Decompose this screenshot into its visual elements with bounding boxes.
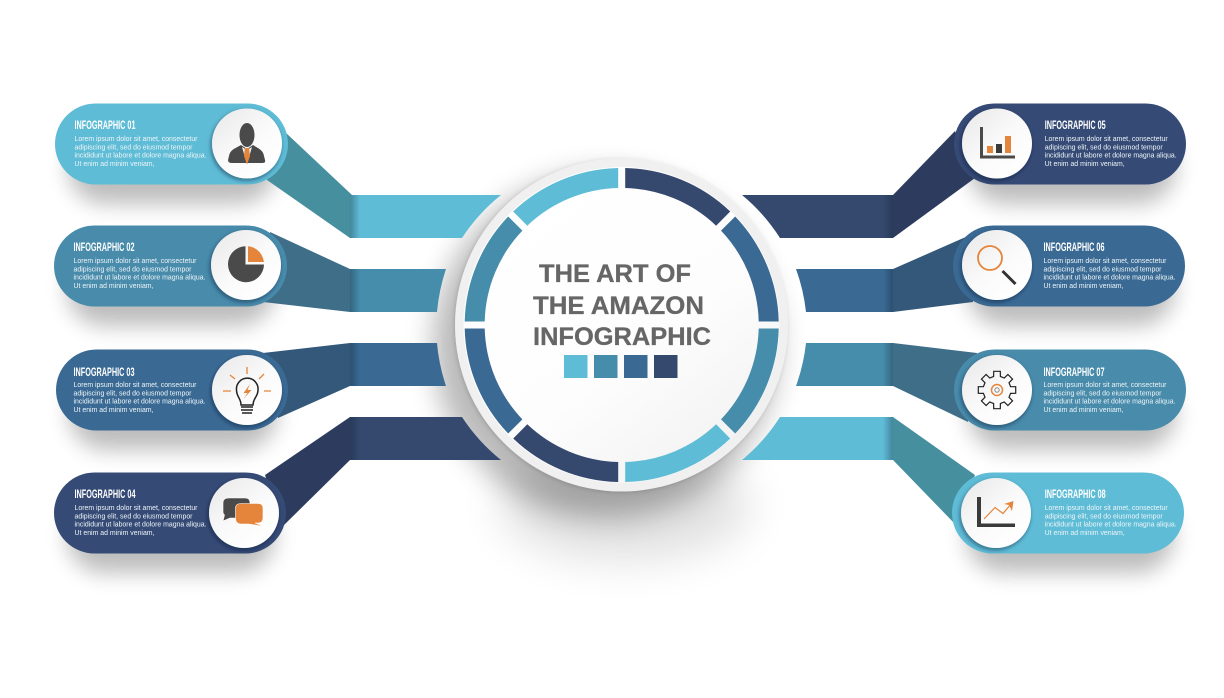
panel: infographic 03: Lorem ipsum dolor sit amet, consectetur [74,382,197,389]
title: THE AMAZON [533,292,704,320]
panel: infographic 03: incididunt ut labore et dolore magna aliqua. [74,399,206,406]
panel: infographic 06: Ut enim ad minim veniam, [1044,283,1124,290]
panel: infographic 08: incididunt ut labore et dolore magna aliqua. [1045,522,1177,529]
connector 03 [263,343,446,418]
panel: infographic 07: INFOGRAPHIC 07 [1044,365,1105,379]
panel: infographic 06: incididunt ut labore et dolore magna aliqua. [1044,275,1176,282]
panel: infographic 04: adipiscing elit, sed do eiusmod tempor [74,513,193,520]
panel: infographic 04 [54,472,286,554]
panel: infographic 04: INFOGRAPHIC 04 [74,487,136,501]
connector 05 [742,131,975,238]
panel: infographic 06: INFOGRAPHIC 06 [1044,240,1105,254]
panel: infographic 06: adipiscing elit, sed do eiusmod tempor [1044,266,1162,273]
connector 02 [263,232,446,312]
panel: infographic 06 [953,226,1185,306]
panel: infographic 03: adipiscing elit, sed do eiusmod tempor [74,390,192,397]
panel: infographic 07: Ut enim ad minim veniam, [1044,407,1124,414]
icon: magnifier [978,246,1016,284]
central circle shadow [433,172,779,560]
colour key squares [564,355,678,378]
panel: infographic 05: adipiscing elit, sed do eiusmod tempor [1045,144,1163,151]
panel: infographic 05: Lorem ipsum dolor sit amet, consectetur [1045,136,1168,143]
panel: infographic 02: INFOGRAPHIC 02 [74,240,135,254]
panel: infographic 01: INFOGRAPHIC 01 [74,118,136,132]
panel: infographic 05 [954,104,1186,184]
panel: infographic 01: Lorem ipsum dolor sit amet, consectetur [74,136,198,143]
title [533,260,711,351]
panel: infographic 05: INFOGRAPHIC 05 [1045,118,1106,132]
panel: infographic 01 [55,104,288,184]
panel: infographic 08: INFOGRAPHIC 08 [1045,487,1106,501]
panel: infographic 07: Lorem ipsum dolor sit amet, consectetur [1044,382,1167,389]
ring segments [465,168,779,482]
title: THE ART OF [539,260,691,288]
panel: infographic 02: incididunt ut labore et dolore magna aliqua. [74,275,206,282]
icon: gear [978,371,1016,409]
panel: infographic 03 [56,350,288,430]
panel: infographic 06: Lorem ipsum dolor sit amet, consectetur [1044,258,1167,265]
panel: infographic 03: Ut enim ad minim veniam, [74,407,154,414]
icon: growth chart [977,497,1015,527]
panel: infographic 02: Ut enim ad minim veniam, [74,283,154,290]
panel: infographic 04: incididunt ut labore et dolore magna aliqua. [74,522,207,529]
pill drop shadows [67,130,1176,573]
panel: infographic 01: Ut enim ad minim veniam, [74,161,155,168]
connector 06 [796,236,973,312]
panel: infographic 04: Ut enim ad minim veniam, [74,530,155,537]
central circle [455,158,788,492]
panel: infographic 05: incididunt ut labore et dolore magna aliqua. [1045,153,1177,160]
panel: infographic 05: Ut enim ad minim veniam, [1045,161,1125,168]
panel: infographic 08: Lorem ipsum dolor sit amet, consectetur [1045,505,1168,512]
panel: infographic 07 [954,350,1186,430]
connector 01 [267,132,501,238]
icon: light bulb [223,367,271,413]
icon: bar chart [980,127,1015,158]
panel: infographic 02 [54,226,287,306]
panel: infographic 07: incididunt ut labore et dolore magna aliqua. [1044,399,1176,406]
panel: infographic 04: Lorem ipsum dolor sit amet, consectetur [74,505,198,512]
icon: pie chart [228,246,264,282]
icon: businessman [228,123,265,164]
title: INFOGRAPHIC [533,323,711,351]
panel: infographic 08: Ut enim ad minim veniam, [1045,530,1125,537]
panel: infographic 01: adipiscing elit, sed do eiusmod tempor [74,144,193,151]
panel: infographic 08 [952,472,1184,554]
panel: infographic 02: Lorem ipsum dolor sit amet, consectetur [74,258,197,265]
icon: chat bubbles [223,498,264,526]
panel: infographic 02: adipiscing elit, sed do eiusmod tempor [74,266,192,273]
panel: infographic 08: adipiscing elit, sed do eiusmod tempor [1045,513,1163,520]
connector 08 [742,417,975,524]
connector 07 [796,343,977,422]
panel: infographic 03: INFOGRAPHIC 03 [74,365,135,379]
panel: infographic 07: adipiscing elit, sed do eiusmod tempor [1044,390,1162,397]
panel: infographic 01: incididunt ut labore et dolore magna aliqua. [74,153,207,160]
connector 04 [265,417,501,527]
